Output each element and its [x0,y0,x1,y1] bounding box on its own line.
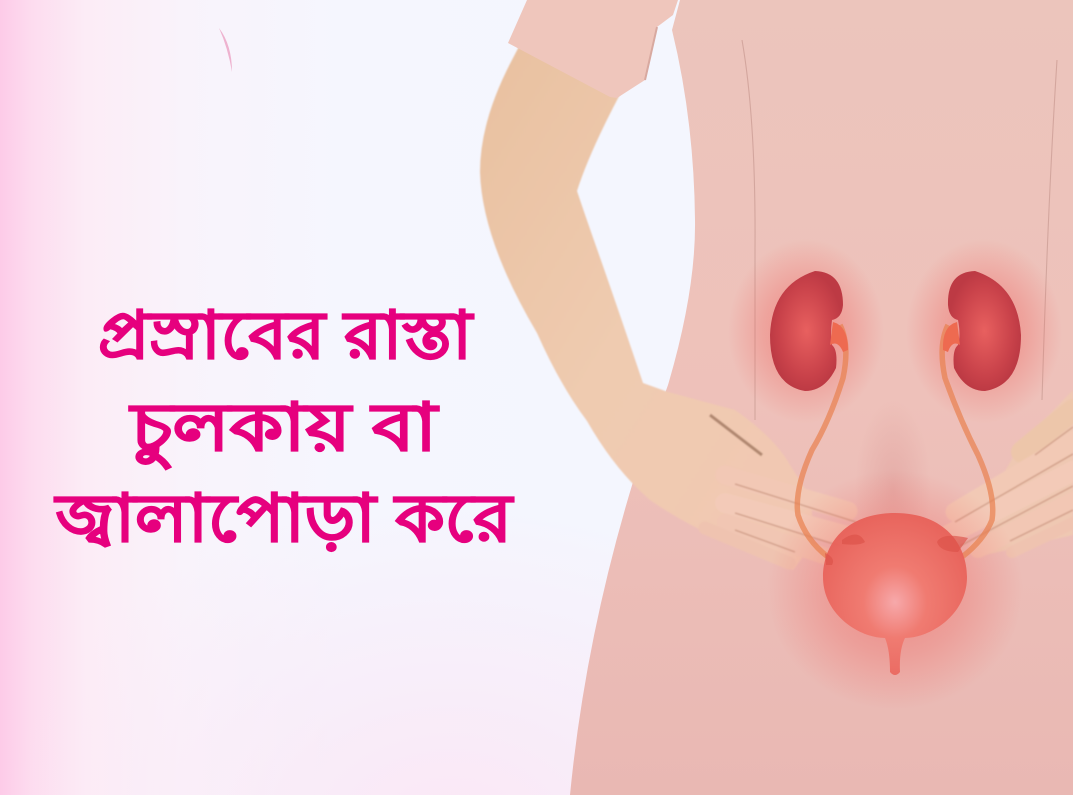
fingertips through bladder [825,534,968,565]
glow around organs [728,239,1062,710]
renal pelvis: right [943,322,960,352]
heading [54,298,515,555]
bladder [823,513,967,675]
heading line 2: চুলকায় বা [129,390,440,470]
dress body [570,0,1073,795]
sleeve [508,0,678,98]
left arm and hand [480,35,856,570]
renal pelvis: left [830,322,848,352]
heading line 3: জ্বালাপোড়া করে [54,481,515,555]
finger creases: right hand [955,427,1073,546]
ureter: right [942,325,993,557]
fingers: left hand [725,475,848,511]
heading line 1: প্রস্রাবের রাস্তা [98,298,475,372]
right hand [948,390,1073,555]
kidney: right [948,271,1021,391]
ureter: left [797,325,846,557]
kidney: left [770,271,843,391]
finger creases: left hand [735,484,856,552]
urinary system illustration [770,271,1021,675]
